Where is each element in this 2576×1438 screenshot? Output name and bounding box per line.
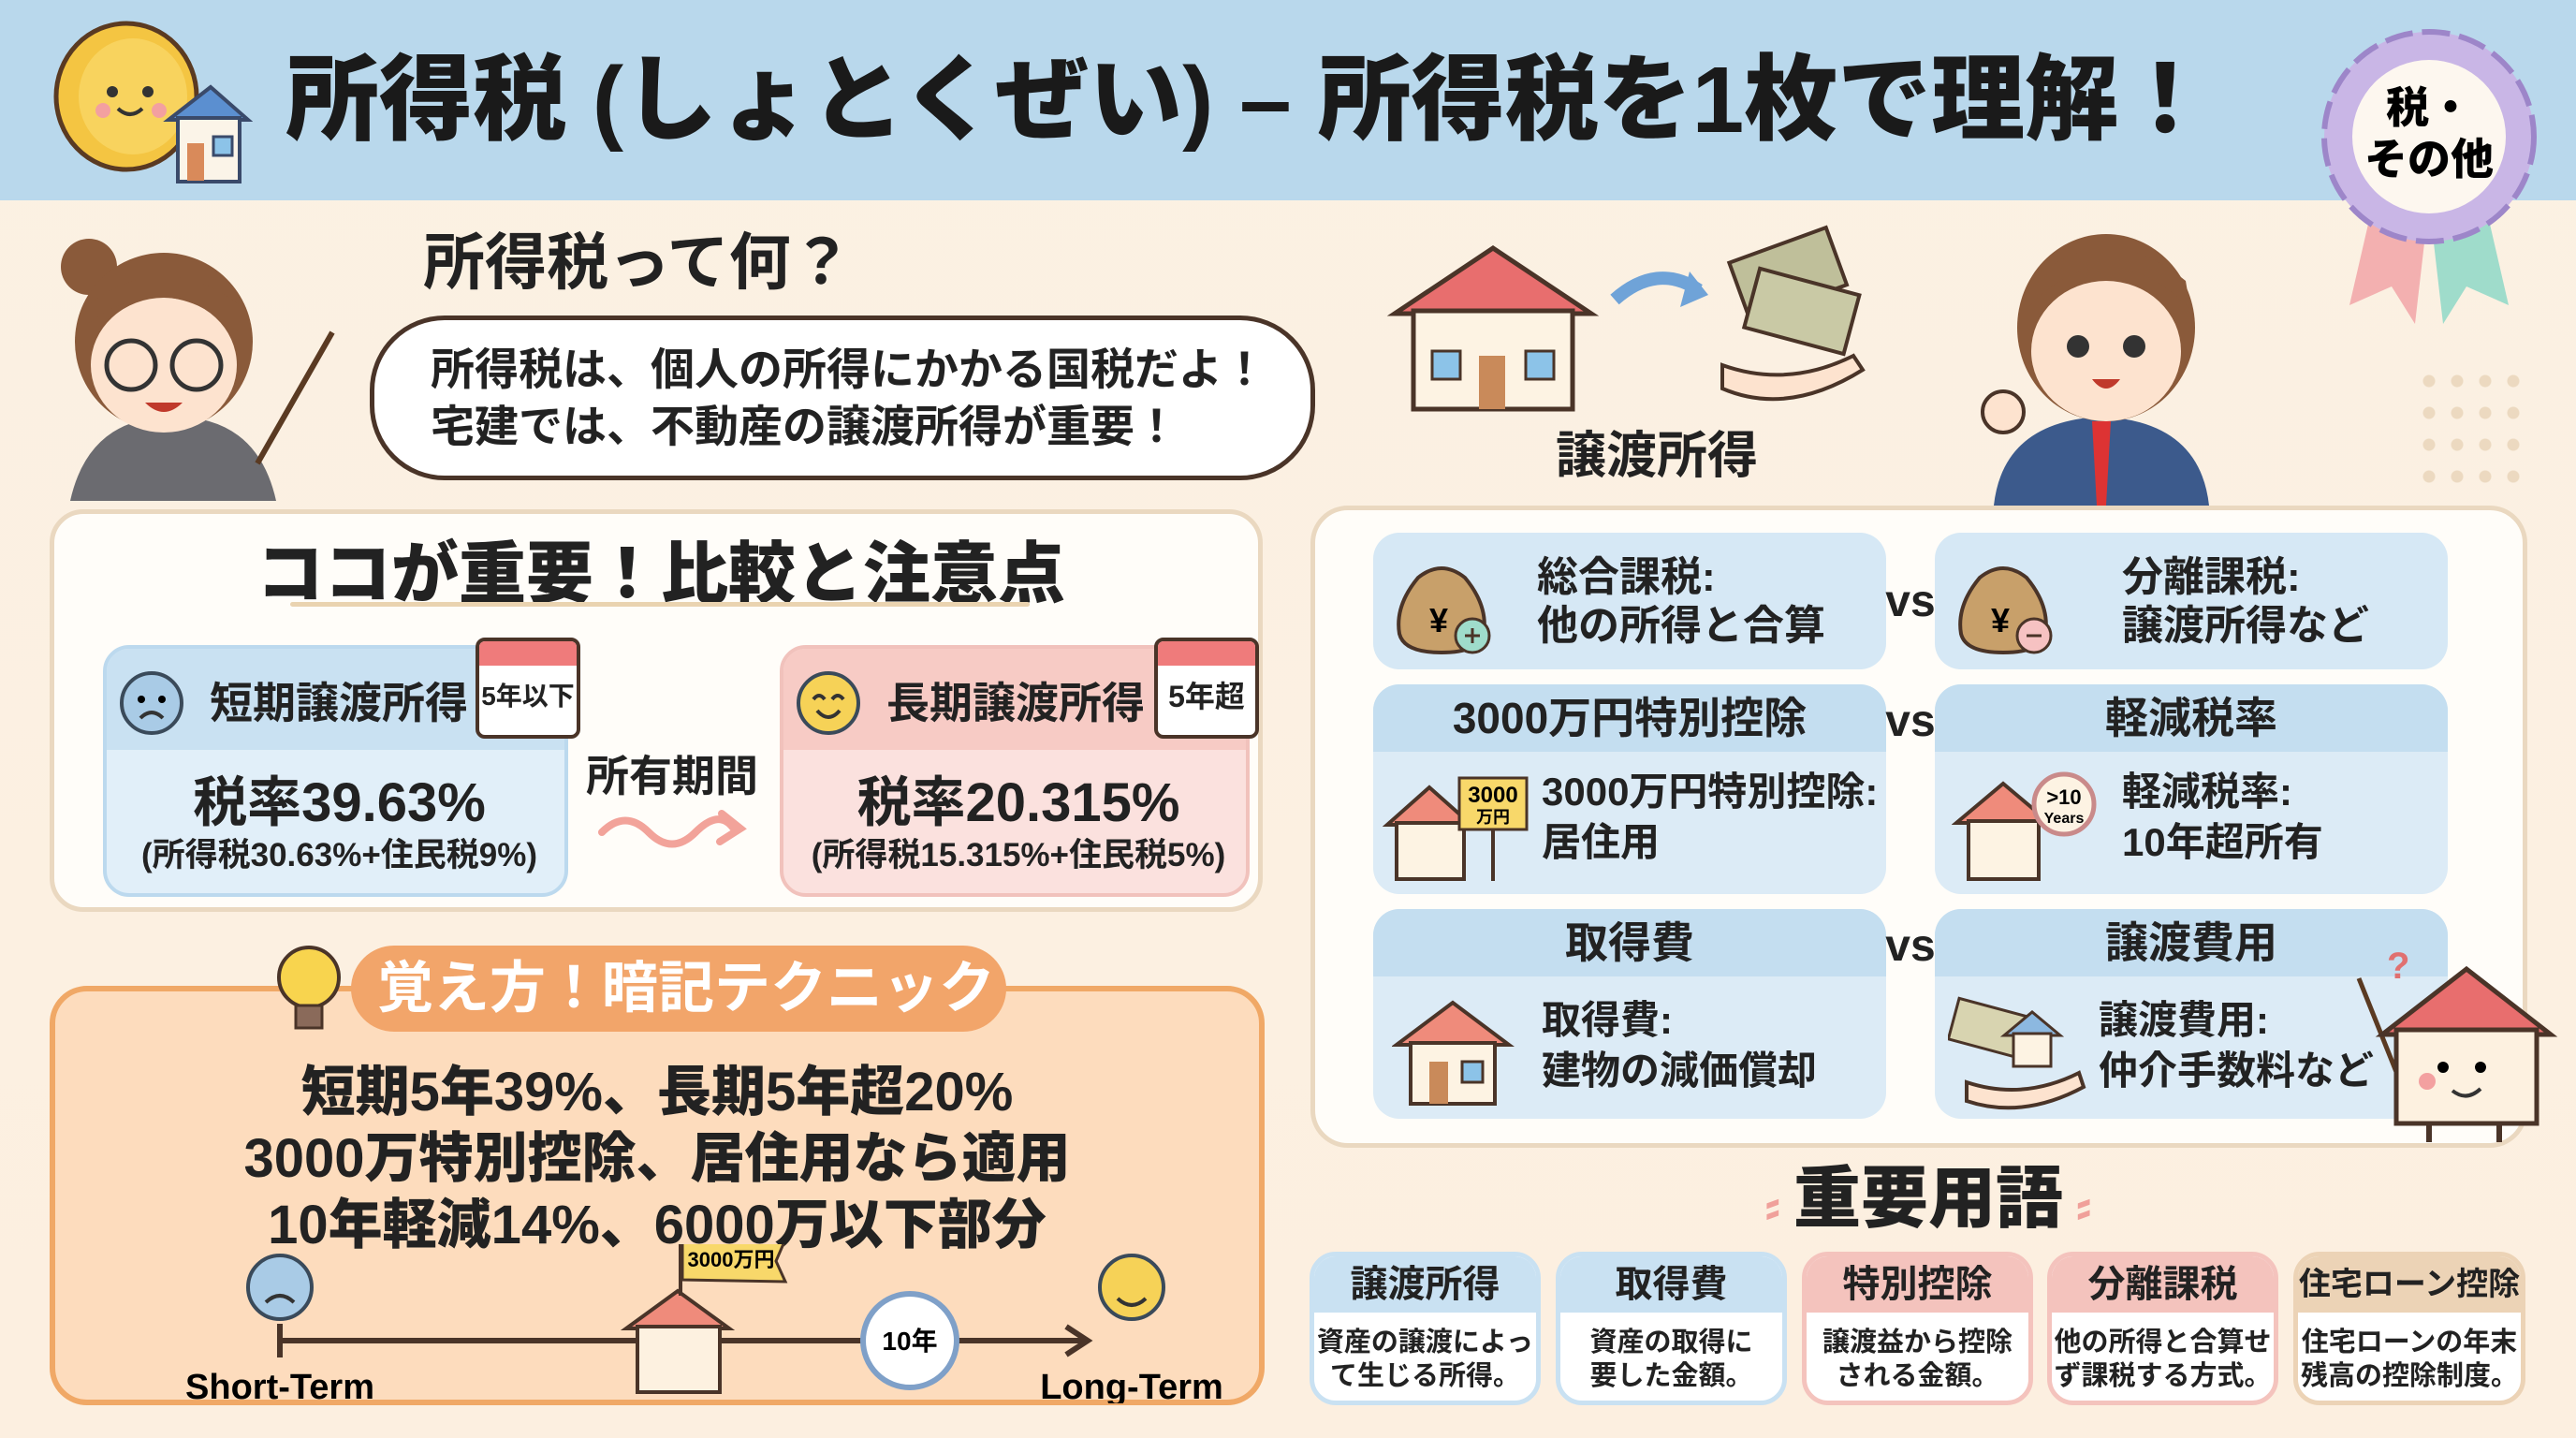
label: vs: vs [1885,697,1936,746]
card: 軽減税率 [1935,684,2448,894]
icon: sad face [120,671,183,735]
card: 取得費 [1373,909,1886,1119]
card: 分離課税: ¥ [1991,601,2010,639]
card: short-term: 税率39.63% [193,772,486,833]
decoration: dots [2415,365,2527,496]
lines of mnemonic: 短期5年39%、長期5年超20% [301,1062,1013,1123]
card: long-term [780,645,1250,897]
card: long-term: 長期譲渡所得 [886,679,1145,727]
icon: happy face [797,671,860,735]
glossary: 分離課税: 分離課税 [2087,1264,2237,1305]
label: vs: vs [1885,577,1936,626]
glossary: 住宅ローン控除 [2293,1252,2525,1405]
card: 軽減税率: 10年超所有 [2122,820,2323,864]
title: 所得税 (しょとくぜい) – 所得税を1枚で理解！ [285,48,2212,153]
timeline [185,1244,1223,1403]
card: 軽減税率: >10 [2046,785,2082,809]
card: 総合課税: ¥ [1429,601,1448,639]
glossary: 譲渡所得: 資産の譲渡によっ [1317,1328,1533,1357]
panel: comparison [50,509,1263,912]
card: 軽減税率: 軽減税率: [2122,770,2292,814]
card: 取得費: 取得費 [1565,918,1694,967]
card: 譲渡費用: 譲渡費用: [2099,998,2269,1042]
icon: boy character [1981,234,2209,506]
glossary: 特別控除: 譲渡益から控除 [1822,1328,2012,1357]
label: vs: vs [1885,921,1936,971]
icon: light bulb [277,946,341,1030]
icon: calendar 5年以下: 5年以下 [481,682,575,711]
card: 3000万円特別控除: 3000万円特別控除: [1542,770,1878,814]
glossary: 住宅ローン控除: 住宅ローン控除 [2299,1267,2520,1302]
glossary: 特別控除: 特別控除 [1842,1264,1992,1305]
glossary: 取得費: 取得費 [1616,1264,1728,1305]
glossary: 分離課税: ず課税する方式。 [2054,1361,2271,1391]
glossary: 譲渡所得: て生じる所得。 [1330,1361,1520,1391]
card: 取得費: 建物の減価償却 [1542,1049,1817,1093]
speech bubble: 所得税は、個人の所得にかかる国税だよ！ [431,345,1266,394]
card: 3000万円特別控除: 3000万円特別控除 [1453,694,1807,742]
card: short-term: 短期譲渡所得 [210,679,468,727]
header band [0,0,2576,200]
icon: house mascot [2357,946,2557,1142]
badge: category rosette: その他 [2364,135,2494,183]
card: 3000万円特別控除 [1373,684,1886,894]
speech bubble [370,315,1315,480]
icon: calendar 5年超 [1154,638,1259,739]
timeline: 10年 [882,1327,938,1356]
card: 総合課税 [1373,533,1886,669]
icon: calendar 5年以下 [476,638,580,739]
panel: memory technique [50,986,1265,1405]
card: short-term: (所得税30.63%+住民税9%) [141,837,537,873]
card: 譲渡費用 [1935,909,2448,1119]
panel: right comparisons [1310,506,2527,1148]
heading: 所得税って何？: 所得税って何？ [423,227,853,297]
card: 譲渡費用: 仲介手数料など [2099,1049,2374,1093]
badge: category rosette [2321,29,2537,324]
card: 分離課税: 譲渡所得など [2122,603,2369,649]
glossary: 特別控除 [1802,1252,2033,1405]
lines of mnemonic: 3000万特別控除、居住用なら適用 [243,1128,1071,1189]
card: 軽減税率: 軽減税率 [2105,694,2277,742]
lines of mnemonic [243,1062,1071,1255]
speech bubble: 宅建では、不動産の譲渡所得が重要！ [431,402,1178,451]
heading: ココが重要！比較と注意点: ココが重要！比較と注意点 [256,537,1065,612]
card: 分離課税 [1935,533,2448,669]
card: 総合課税: 総合課税: [1537,554,1716,600]
glossary: 住宅ローン控除: 住宅ローンの年末 [2302,1328,2517,1357]
glossary: 譲渡所得: 譲渡所得 [1350,1264,1500,1305]
card: 譲渡費用: 譲渡費用 [2105,918,2277,967]
glossary: 分離課税 [2047,1252,2278,1405]
glossary: 住宅ローン控除: 残高の控除制度。 [2301,1361,2518,1391]
icon: teacher character [61,239,335,501]
glossary: 取得費: 資産の取得に [1589,1328,1752,1357]
illustration: house to money [1387,225,1866,412]
glossary: 分離課税: 他の所得と合算せ [2054,1328,2271,1357]
glossary: 取得費: 要した金額。 [1589,1361,1752,1391]
label: 所有期間 with arrow: 所有期間 [586,752,758,800]
card: long-term: (所得税15.315%+住民税5%) [812,837,1225,873]
card: 取得費: 取得費: [1542,998,1673,1042]
icon: calendar 5年超: 5年超 [1168,680,1245,713]
glossary: 特別控除: される金額。 [1836,1361,1999,1391]
card: 総合課税: 他の所得と合算 [1537,603,1825,649]
card: 3000万円特別控除: 万円 [1476,808,1510,827]
icon: house mascot: ? [2387,946,2409,987]
label: 所有期間 with arrow [586,752,758,848]
glossary: 取得費 [1556,1252,1787,1405]
card: 3000万円特別控除: 3000 [1468,783,1518,808]
badge: category rosette: 税・ [2386,83,2472,132]
tab heading: 覚え方！暗記テクニック: 覚え方！暗記テクニック [377,957,995,1020]
card: 軽減税率: Years [2044,811,2084,827]
card: short-term [103,645,568,897]
timeline: 3000万円 [688,1248,774,1271]
card: 3000万円特別控除: 居住用 [1542,820,1660,864]
card: 分離課税: 分離課税: [2122,554,2301,600]
card: long-term: 税率20.315% [857,772,1179,833]
glossary: 譲渡所得 [1310,1252,1541,1405]
tab heading: 覚え方！暗記テクニック [277,946,1006,1032]
lines of mnemonic: 10年軽減14%、6000万以下部分 [268,1195,1046,1255]
icon: coin mascot with house [54,21,253,183]
label: 譲渡所得: 譲渡所得 [1556,428,1758,484]
heading: 重要用語: ⸗ 重要用語 ⸗ [1764,1162,2092,1237]
